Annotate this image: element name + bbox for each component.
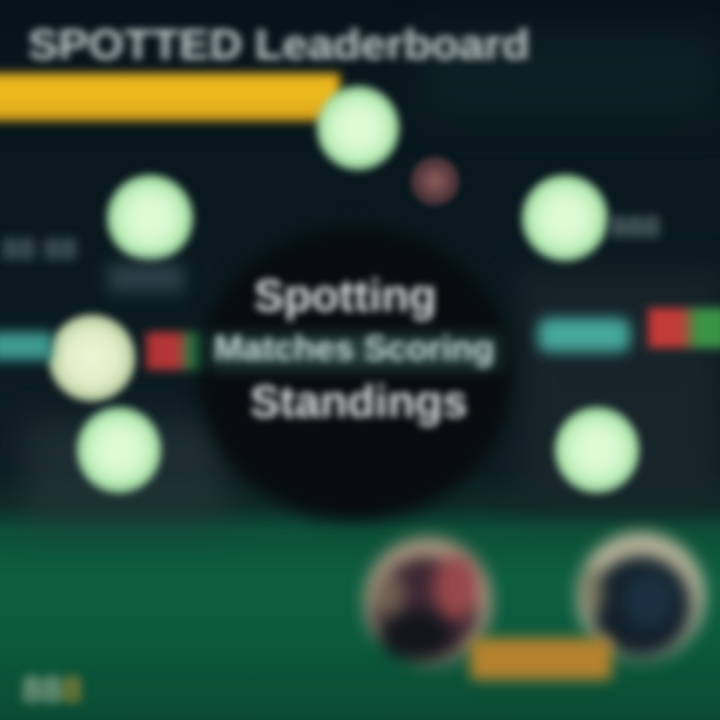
left label upper: 88 88 xyxy=(2,233,77,266)
soccer ball right xyxy=(565,520,717,671)
red and green chip left xyxy=(146,332,202,370)
background: dim stands upper right xyxy=(420,30,720,120)
teal bar right xyxy=(538,318,630,352)
right label upper: 888 xyxy=(610,211,660,244)
orange connector xyxy=(470,638,612,680)
teal strip through center xyxy=(210,335,500,369)
glowing node middle left xyxy=(48,314,136,402)
center text xyxy=(210,270,498,432)
background: dim stands left xyxy=(25,420,225,525)
glowing node lower left xyxy=(76,406,162,494)
center line 1: Spotting xyxy=(254,270,436,321)
background: dim stands right xyxy=(520,270,720,510)
soccer ball left xyxy=(352,526,504,676)
central dark circle xyxy=(198,228,512,520)
logo bottom left: 888 xyxy=(22,669,82,710)
title: SPOTTED Leaderboard xyxy=(28,21,530,69)
glowing node lower right xyxy=(554,406,640,494)
red and green chip right xyxy=(648,308,720,348)
center line 2: Matches Scoring xyxy=(214,329,494,368)
glowing node upper right xyxy=(521,174,609,262)
glowing node upper left xyxy=(106,174,194,262)
small red node xyxy=(410,156,460,206)
teal bar left xyxy=(0,332,52,360)
yellow banner xyxy=(0,73,340,121)
left label under node xyxy=(108,264,184,292)
center line 3: Standings xyxy=(250,376,468,427)
glowing node top xyxy=(316,85,400,171)
